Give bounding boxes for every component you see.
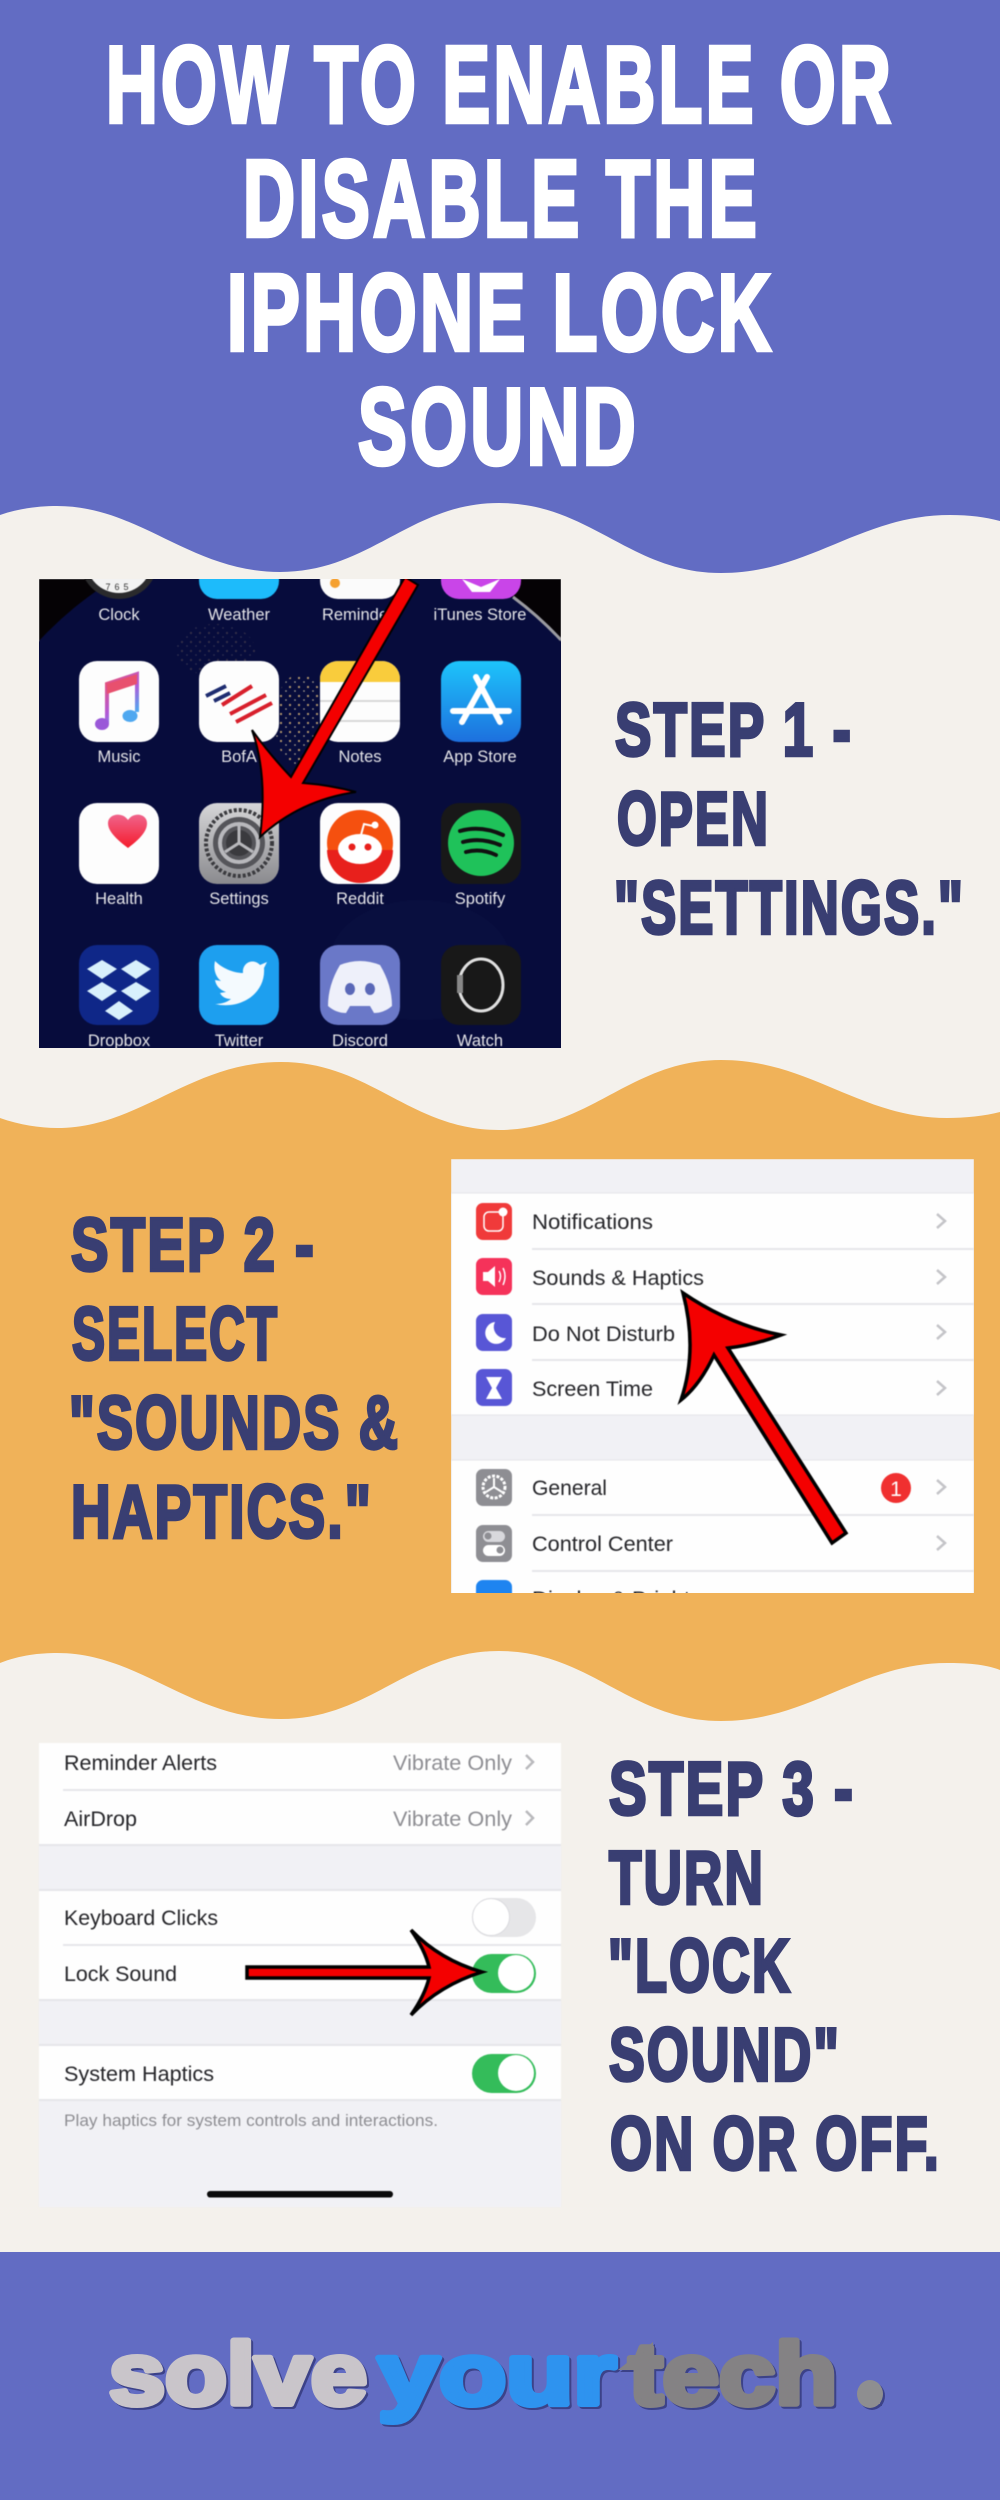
- badge: 1: [890, 1478, 902, 1501]
- app labels: Reddit: [336, 890, 384, 908]
- app labels: Spotify: [455, 890, 506, 908]
- app labels: Dropbox: [88, 1032, 151, 1050]
- badge: [881, 1473, 911, 1503]
- step 3 text: [608, 1746, 941, 2186]
- app labels: BofA: [221, 748, 257, 766]
- toggle: system haptics on: [472, 2054, 536, 2093]
- app labels: Discord: [332, 1032, 388, 1050]
- menu labels: Do Not Disturb: [532, 1322, 675, 1346]
- icon: do not disturb: [476, 1314, 512, 1351]
- icon: reddit: [320, 803, 400, 884]
- menu labels: Notifications: [532, 1210, 653, 1234]
- step 2 text: [69, 1202, 400, 1554]
- setting labels: System Haptics: [64, 2062, 214, 2086]
- logo: solveyourtech: your: [378, 2326, 616, 2423]
- step 2 text: STEP 2 -: [71, 1202, 316, 1286]
- arrow: points to sounds and haptics: [681, 1293, 846, 1543]
- menu labels: Control Center: [532, 1532, 673, 1556]
- icon: reminders: [319, 579, 401, 600]
- app labels: [88, 606, 526, 1050]
- setting labels: AirDrop: [64, 1807, 137, 1831]
- logo: solveyourtech: .: [859, 2314, 887, 2426]
- icon: display: [475, 1579, 513, 1593]
- app labels: Watch: [457, 1032, 503, 1050]
- icon: notifications: [476, 1203, 512, 1240]
- chevrons: [937, 1214, 945, 1550]
- setting labels: Lock Sound: [64, 1962, 177, 1986]
- title: [106, 24, 894, 488]
- icon: clock: [84, 579, 154, 600]
- icon: app store: [441, 661, 521, 742]
- app labels: Settings: [209, 890, 269, 908]
- arrow: points to lock sound toggle: [247, 1930, 482, 2015]
- app labels: Notes: [338, 748, 382, 766]
- step 2 text: SELECT: [72, 1292, 279, 1376]
- menu labels: Display & Brightness: [532, 1587, 737, 1611]
- app labels: iTunes Store: [434, 606, 526, 624]
- icon: bank of america: [199, 661, 279, 742]
- icon: discord: [320, 945, 400, 1025]
- step 2 screenshot: settings menu: [451, 1159, 974, 1617]
- icon: spotify: [441, 803, 521, 884]
- menu labels: Screen Time: [532, 1377, 653, 1401]
- toggle: lock sound on: [472, 1954, 536, 1993]
- icon: settings: [199, 803, 279, 884]
- icon: weather: [198, 579, 280, 600]
- app labels: Clock: [98, 606, 140, 624]
- icon: general: [476, 1469, 512, 1506]
- step 2 text: "SOUNDS &: [69, 1380, 400, 1464]
- icon: music: [79, 661, 159, 742]
- app labels: Reminde: [322, 606, 388, 624]
- arrow: points to settings: [252, 577, 418, 837]
- app labels: Music: [97, 748, 141, 766]
- menu labels: Sounds & Haptics: [532, 1266, 704, 1290]
- app labels: App Store: [443, 748, 517, 766]
- app labels: Weather: [208, 606, 271, 624]
- icon: twitter: [199, 945, 279, 1025]
- toggle: keyboard clicks off: [472, 1898, 536, 1937]
- menu labels: [532, 1212, 704, 1593]
- icon: health: [79, 803, 159, 884]
- header band: [0, 0, 1000, 573]
- step 3 screenshot: sounds settings: [39, 1743, 561, 2207]
- logo: solveyourtech: tech: [629, 2326, 837, 2423]
- orange band: [0, 1060, 1000, 1721]
- step 1 text: [614, 688, 965, 950]
- icon: control center: [476, 1525, 512, 1562]
- icon: watch: [441, 945, 521, 1025]
- step 3 text: SOUND": [609, 2012, 841, 2096]
- icon: sounds: [476, 1258, 512, 1295]
- setting labels: [64, 1751, 512, 2130]
- title: SOUND: [358, 366, 639, 488]
- setting labels: Vibrate Only: [393, 1751, 512, 1775]
- icon: screen time: [476, 1369, 512, 1406]
- setting labels: Play haptics for system controls and interactions.: [64, 2112, 438, 2130]
- step 3 text: TURN: [609, 1836, 765, 1920]
- step 2 text: HAPTICS.": [71, 1470, 373, 1554]
- app labels: Health: [95, 890, 143, 908]
- step 3 text: STEP 3 -: [609, 1746, 855, 1830]
- logo: solveyourtech: solve: [109, 2326, 367, 2423]
- menu labels: General: [532, 1476, 607, 1500]
- step 3 text: "LOCK: [608, 1924, 792, 2008]
- icon: dropbox: [79, 945, 159, 1025]
- setting labels: Reminder Alerts: [64, 1751, 217, 1775]
- step 1 screenshot: iPhone home screen: [39, 579, 561, 1048]
- home indicator: [207, 2191, 393, 2198]
- setting labels: Vibrate Only: [393, 1807, 512, 1831]
- chevrons: [526, 1755, 533, 1825]
- logo: solveyourtech: [109, 2314, 887, 2426]
- icon: notes: [320, 661, 400, 742]
- app labels: Twitter: [215, 1032, 264, 1050]
- setting labels: Keyboard Clicks: [64, 1906, 218, 1930]
- footer band: [0, 2252, 1000, 2500]
- icon: itunes store: [440, 579, 522, 600]
- icon: clock: 765: [105, 582, 133, 592]
- step 1 text: OPEN: [617, 776, 770, 860]
- step 1 text: STEP 1 -: [615, 688, 853, 772]
